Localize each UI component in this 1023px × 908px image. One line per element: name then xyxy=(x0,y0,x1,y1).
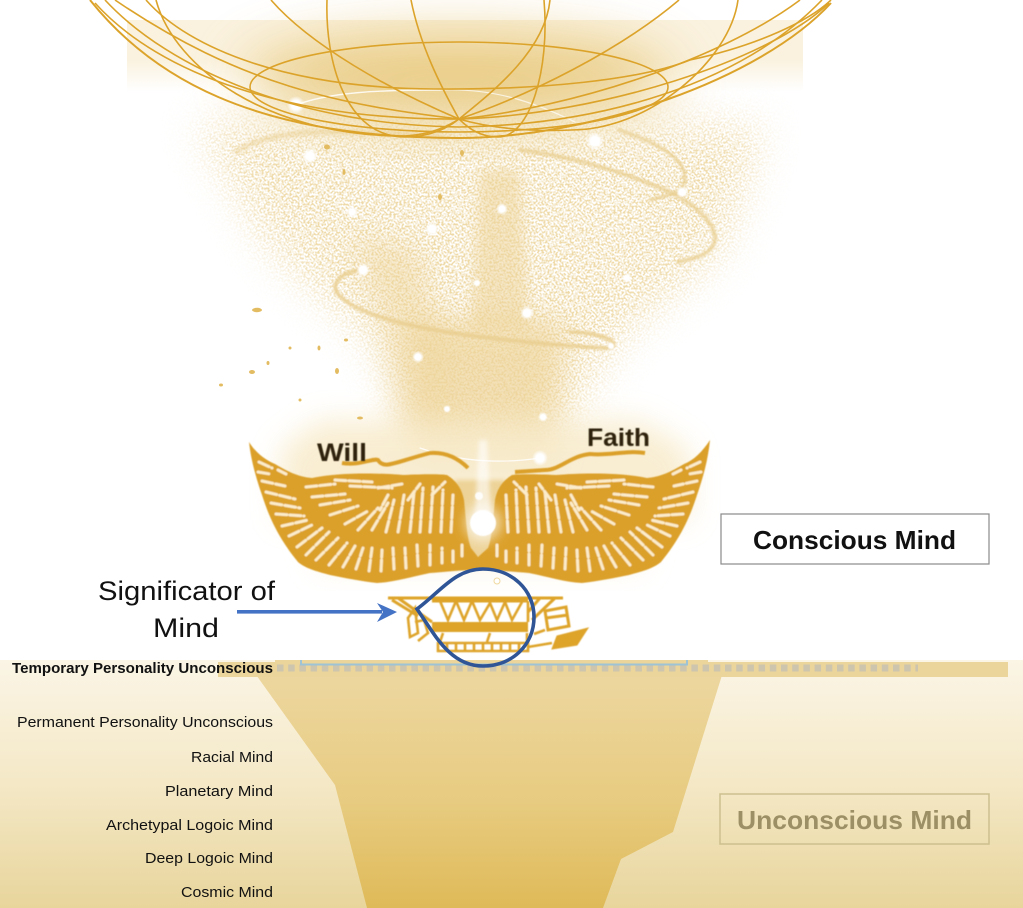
box: conscious mind: Conscious Mind xyxy=(753,525,956,555)
labels: mind levels: Deep Logoic Mind xyxy=(145,850,273,867)
labels: mind levels: Permanent Personality Unconscious xyxy=(17,714,273,731)
labels: mind levels: Planetary Mind xyxy=(165,783,273,800)
labels: mind levels: Temporary Personality Unconscious xyxy=(12,660,273,677)
gold flecks xyxy=(219,144,464,420)
label: Faith: Faith xyxy=(587,424,650,452)
icon: blue teardrop xyxy=(417,569,534,666)
labels: mind levels xyxy=(12,660,273,901)
label: significator of mind: Mind xyxy=(153,613,219,643)
glow under sphere xyxy=(127,20,803,125)
labels: mind levels: Cosmic Mind xyxy=(181,884,273,901)
label: Will: Will xyxy=(317,439,367,467)
light points xyxy=(287,96,688,466)
box: unconscious mind: Unconscious Mind xyxy=(737,805,972,835)
left wing feathers xyxy=(258,462,462,571)
left wing ridge xyxy=(342,453,468,468)
temporary personality band xyxy=(218,660,1008,677)
right wing xyxy=(478,440,710,583)
box: unconscious mind xyxy=(720,794,989,844)
wing center fill xyxy=(455,480,505,560)
labels: mind levels: Archetypal Logoic Mind xyxy=(106,817,273,834)
left wing xyxy=(249,442,478,583)
arrow: significator pointer xyxy=(237,603,397,622)
icon: wire sphere xyxy=(90,0,831,138)
label: significator of mind xyxy=(98,576,276,643)
central light beam xyxy=(465,440,501,584)
right wing ridge xyxy=(515,452,645,472)
label: significator of mind: Significator of xyxy=(98,576,276,606)
background: unconscious region xyxy=(0,660,1023,908)
labels: mind levels: Racial Mind xyxy=(191,749,273,766)
icon: significator ship xyxy=(388,598,588,651)
spiral trails xyxy=(236,90,715,461)
box: conscious mind xyxy=(721,514,989,564)
funnel: unconscious depth xyxy=(254,672,723,908)
speckled mist funnel xyxy=(195,125,765,570)
right wing feathers xyxy=(497,462,701,571)
icon: wings xyxy=(249,440,710,583)
